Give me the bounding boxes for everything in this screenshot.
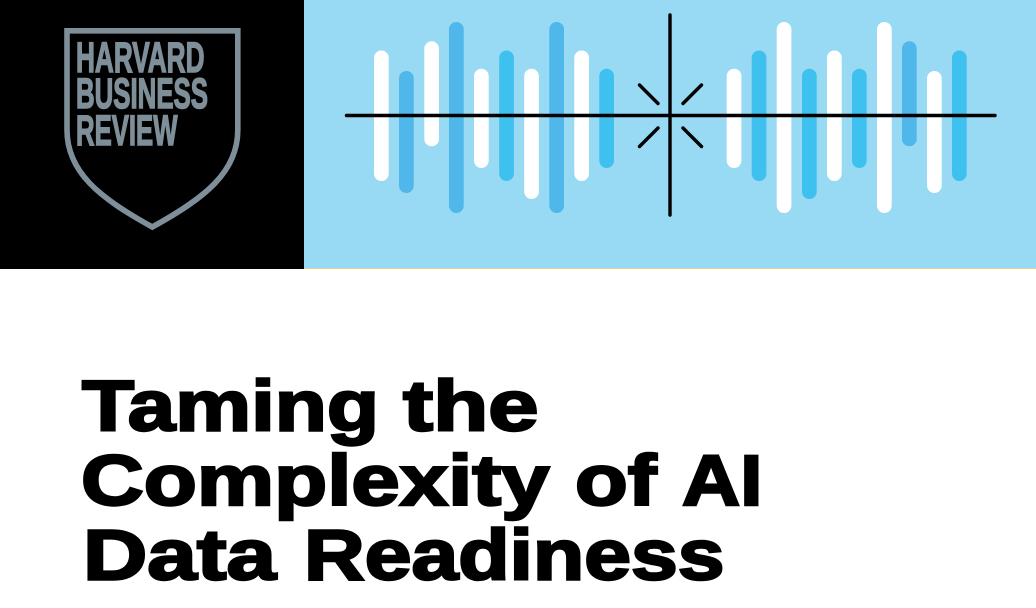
title: Data: [83, 516, 277, 595]
banner bottom edge: [304, 268, 1036, 269]
title: the: [403, 367, 538, 446]
title: [81, 367, 762, 595]
icon: shield outline: [67, 31, 238, 227]
logo wordmark: BUSINESS: [76, 70, 208, 118]
title: AI: [682, 442, 762, 521]
logo wordmark: HARVARD: [76, 34, 204, 82]
panel: light blue banner background: [304, 0, 1036, 268]
panel: black logo background: [0, 0, 304, 269]
logo wordmark: [76, 34, 208, 155]
chart: right waveform bars: [727, 22, 967, 213]
title: Taming: [82, 367, 379, 446]
title: Readiness: [304, 516, 724, 595]
title: Complexity: [81, 442, 550, 521]
title: of: [575, 442, 657, 521]
chart: left waveform bars: [374, 22, 614, 213]
logo wordmark: REVIEW: [76, 107, 178, 155]
icon: crosshair axes and spark lines: [346, 15, 995, 215]
logo: Harvard Business Review shield: [67, 31, 238, 227]
